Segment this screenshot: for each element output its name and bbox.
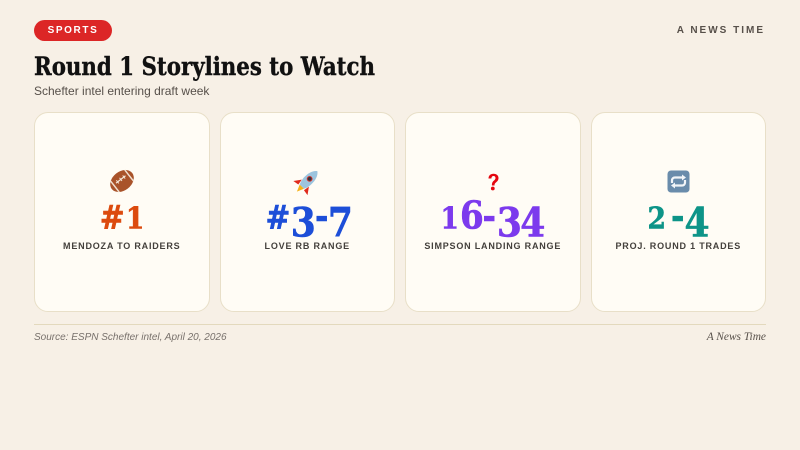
stat: #1 — [100, 199, 144, 237]
panel: Simpson — [405, 112, 580, 312]
label: LOVE RB RANGE — [265, 241, 350, 251]
stat: #3-7: 7 — [327, 199, 352, 246]
label: MENDOZA TO RAIDERS — [63, 241, 180, 251]
brand signature: A News Time — [707, 330, 766, 342]
panel: Love — [220, 112, 395, 312]
stat: 16-34: 3 — [497, 199, 522, 246]
brand name: A NEWS TIME — [677, 25, 765, 36]
icon: rocket — [294, 171, 318, 195]
panel: Trades — [590, 112, 766, 312]
stat: 16-34 — [440, 193, 545, 246]
stat: #3-7 — [265, 196, 352, 246]
subtitle: Schefter intel entering draft week — [34, 84, 209, 98]
stat: 2-4 — [647, 196, 709, 246]
category pill: SPORTS — [48, 25, 98, 36]
stat: #1: 1 — [126, 201, 144, 236]
label: SIMPSON LANDING RANGE — [424, 241, 561, 251]
category pill — [34, 20, 112, 41]
source note: Source: ESPN Schefter intel, April 20, 2026 — [34, 332, 227, 343]
title: Round 1 Storylines to Watch — [34, 52, 375, 81]
stat: 2-4: - — [671, 196, 684, 238]
stat: 2-4: 2 — [647, 201, 665, 236]
icon: repeat arrows — [668, 170, 690, 192]
panel: Mendoza — [34, 112, 210, 312]
label: PROJ. ROUND 1 TRADES — [615, 241, 741, 251]
stat: #3-7: # — [265, 199, 290, 237]
stat: 2-4: 4 — [684, 199, 709, 246]
icon: football — [110, 170, 134, 192]
icon: question mark — [488, 174, 498, 190]
stat: 16-34: 4 — [520, 199, 545, 246]
stat: #3-7: - — [315, 196, 328, 238]
stat: 16-34: 1 — [440, 201, 459, 236]
stat: 16-34: 6 — [460, 193, 484, 238]
stat: #1: # — [100, 199, 125, 237]
stat: 16-34: - — [483, 196, 496, 238]
stat: #3-7: 3 — [290, 199, 315, 246]
